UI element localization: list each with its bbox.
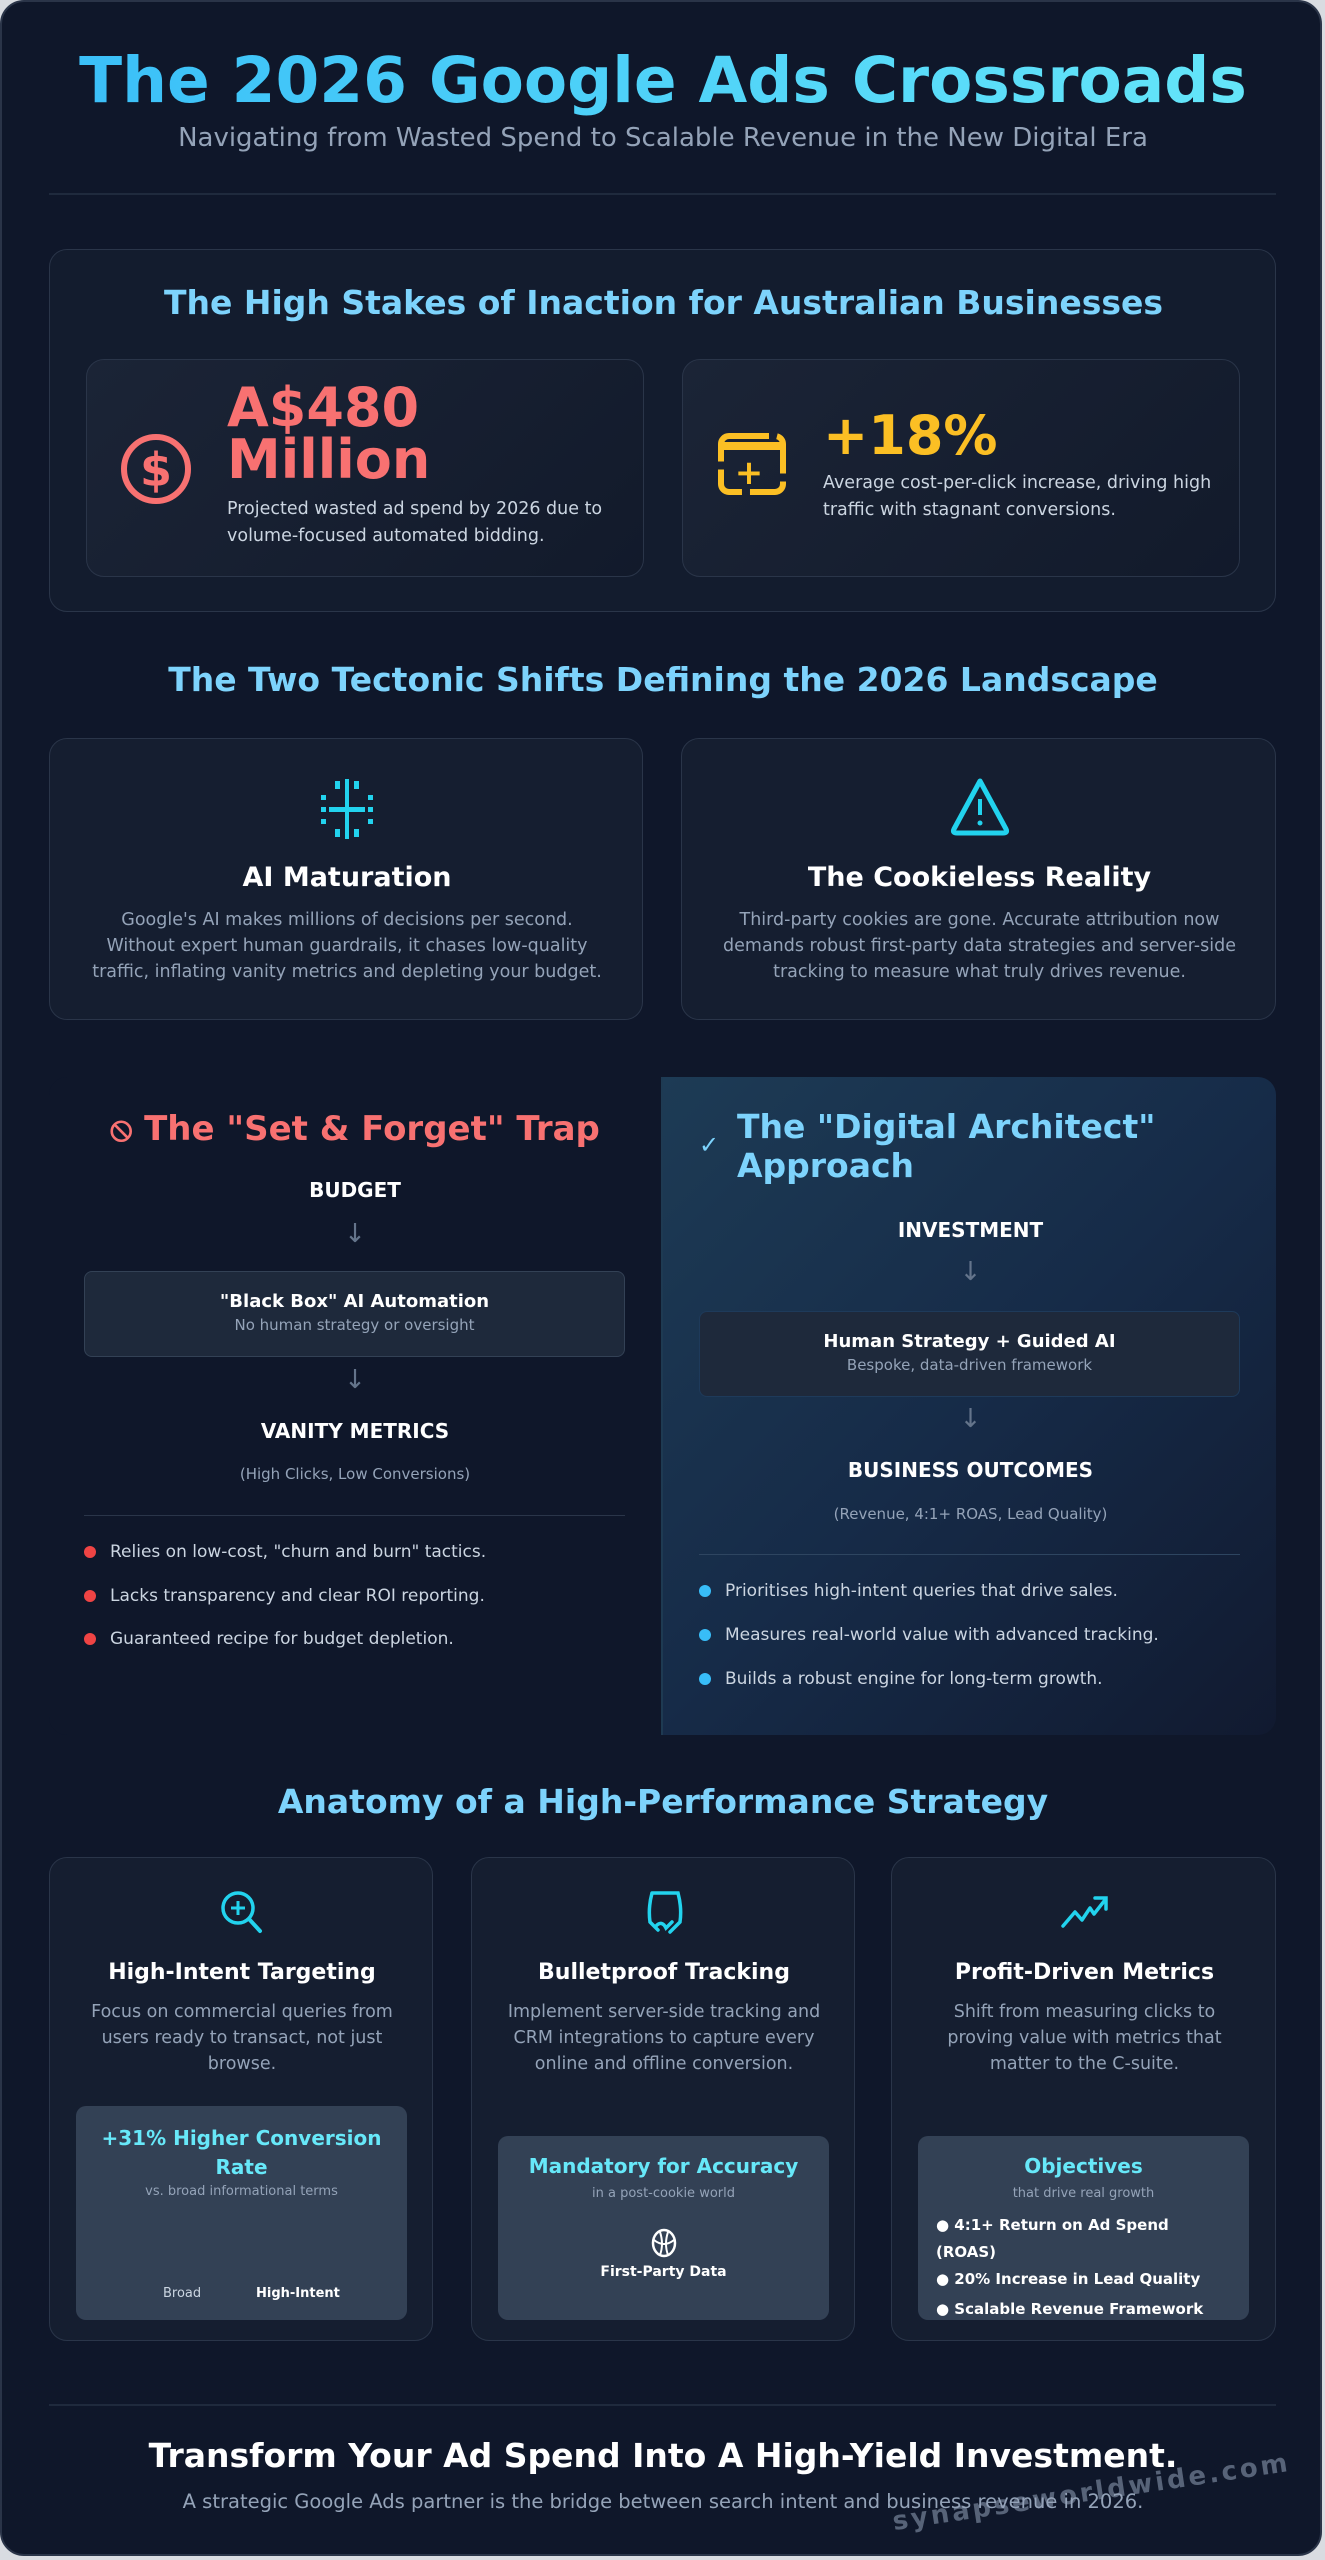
CTA heading: Transform Your Ad Spend Into A High-Yield Investment.	[149, 2436, 1177, 2475]
icon: chip	[321, 779, 373, 839]
bullet list: Builds a robust engine for long-term growth.	[725, 1669, 1103, 1689]
heading: architect: The "Digital Architect"	[737, 1107, 1155, 1146]
icon: dollar: $	[140, 443, 172, 497]
label: investment: INVESTMENT	[898, 1218, 1043, 1242]
callout: objectives: Objectives	[1024, 2154, 1143, 2178]
icon: tracking	[648, 1891, 682, 1934]
card title: High-Intent Targeting	[108, 1960, 376, 1985]
callout: conversion rate	[76, 2106, 407, 2320]
icon: trending up	[1061, 1896, 1108, 1928]
card: AI maturation	[49, 738, 643, 1020]
callout: mandatory: Mandatory for Accuracy	[529, 2154, 798, 2178]
callout: objectives: ● Scalable Revenue Framework	[936, 2300, 1203, 2318]
label: budget: BUDGET	[309, 1178, 401, 1202]
bullet list: Guaranteed recipe for budget depletion.	[110, 1629, 454, 1649]
stat description: Average cost-per-click increase, driving high traffic with stagnant conversions.	[823, 473, 1211, 520]
left column: set & forget	[84, 1109, 625, 1649]
bullet list	[84, 1542, 486, 1649]
card title: Bulletproof Tracking	[538, 1960, 790, 1985]
stat value	[227, 376, 430, 491]
card: profit-driven metrics	[891, 1857, 1276, 2341]
callout: objectives: that drive real growth	[1013, 2186, 1154, 2201]
box: black box: "Black Box" AI Automation	[220, 1291, 489, 1312]
caption: (High Clicks, Low Conversions)	[240, 1465, 470, 1483]
stat value: +18%	[823, 404, 998, 467]
CTA subtitle: A strategic Google Ads partner is the bridge between search intent and business revenue in 2026.	[183, 2490, 1143, 2513]
callout: mandatory: First-Party Data	[600, 2264, 727, 2280]
subtitle: Navigating from Wasted Spend to Scalable Revenue in the New Digital Era	[178, 123, 1148, 153]
icon: calendar: +	[735, 453, 763, 493]
stat description: Projected wasted ad spend by 2026 due to volume-focused automated bidding.	[227, 499, 602, 546]
label: vanity metrics: VANITY METRICS	[261, 1419, 449, 1443]
card title: AI Maturation	[242, 862, 452, 893]
callout: mandatory	[498, 2136, 829, 2320]
card text: Google's AI makes millions of decisions per second. Without expert human guardrails, it chases low-quality traffic, inflating vanity metrics and depleting your budget.	[92, 910, 602, 982]
bullet list	[699, 1581, 1159, 1689]
box: human strategy: Bespoke, data-driven framework	[847, 1356, 1092, 1374]
arrow: ↓	[960, 1404, 981, 1434]
title: The 2026 Google Ads Crossroads	[79, 44, 1247, 117]
heading: architect: ✓	[699, 1131, 719, 1159]
caption: (Revenue, 4:1+ ROAS, Lead Quality)	[834, 1505, 1107, 1523]
panel: comparison	[49, 1077, 1276, 1735]
heading: high stakes: The High Stakes of Inaction for Australian Businesses	[164, 283, 1163, 322]
box: human strategy	[699, 1311, 1240, 1397]
heading: tectonic shifts: The Two Tectonic Shifts Defining the 2026 Landscape	[168, 660, 1158, 699]
card text: Focus on commercial queries from users ready to transact, not just browse.	[91, 2002, 393, 2074]
card text: Third-party cookies are gone. Accurate attribution now demands robust first-party data strategies and server-side tracking to measure what truly drives revenue.	[723, 910, 1236, 982]
watermark: synapseworldwide.com	[891, 2448, 1292, 2537]
callout: conversion rate: +31% Higher Conversion	[102, 2126, 382, 2150]
arrow: ↓	[344, 1365, 366, 1395]
box: human strategy: Human Strategy + Guided AI	[823, 1331, 1116, 1352]
callout: conversion rate: Rate	[215, 2155, 268, 2179]
bullet list: Relies on low-cost, "churn and burn" tactics.	[110, 1542, 486, 1562]
callout: conversion rate: vs. broad informational terms	[145, 2184, 338, 2199]
heading: anatomy: Anatomy of a High-Performance Strategy	[278, 1782, 1048, 1821]
stat card: wasted spend	[86, 359, 644, 577]
box: black box: No human strategy or oversight	[234, 1316, 475, 1334]
card: cookieless	[681, 738, 1276, 1020]
card title: Profit-Driven Metrics	[955, 1960, 1214, 1985]
bullet list: Prioritises high-intent queries that drive sales.	[725, 1581, 1118, 1601]
card: high-intent targeting	[49, 1857, 433, 2341]
stat card: cpc	[682, 359, 1240, 577]
card: bulletproof tracking	[471, 1857, 855, 2341]
callout: mandatory: in a post-cookie world	[592, 2186, 735, 2201]
callout: objectives: ● 20% Increase in Lead Quality	[936, 2270, 1200, 2288]
card title: The Cookieless Reality	[808, 862, 1151, 893]
callout: conversion rate: Broad	[163, 2286, 201, 2301]
icon: calendar	[718, 433, 786, 495]
heading: architect: Approach	[737, 1146, 914, 1185]
right column: digital architect	[661, 1077, 1276, 1735]
icon: search plus	[221, 1891, 262, 1934]
heading: trap: ⦸ The "Set & Forget" Trap	[110, 1109, 600, 1149]
bullet list: Lacks transparency and clear ROI reporting.	[110, 1586, 485, 1606]
bullet list: Measures real-world value with advanced tracking.	[725, 1625, 1159, 1645]
card text: Shift from measuring clicks to proving value with metrics that matter to the C-suite.	[947, 2002, 1222, 2074]
arrow: ↓	[960, 1257, 981, 1287]
label: business outcomes: BUSINESS OUTCOMES	[848, 1458, 1093, 1482]
box: black box	[84, 1271, 625, 1357]
arrow: ↓	[344, 1219, 366, 1249]
panel: high stakes	[49, 249, 1276, 612]
heading: architect	[699, 1107, 1155, 1185]
stat value: Million	[227, 428, 430, 491]
callout: objectives: ● 4:1+ Return on Ad Spend (ROAS)	[936, 2216, 1169, 2261]
callout: objectives	[918, 2136, 1249, 2320]
stat value: A$480	[227, 376, 419, 439]
callout: conversion rate: High-Intent	[256, 2286, 340, 2301]
icon: warning	[950, 778, 1010, 836]
card text: Implement server-side tracking and CRM integrations to capture every online and offline conversion.	[508, 2002, 820, 2074]
icon: dollar	[121, 434, 191, 504]
